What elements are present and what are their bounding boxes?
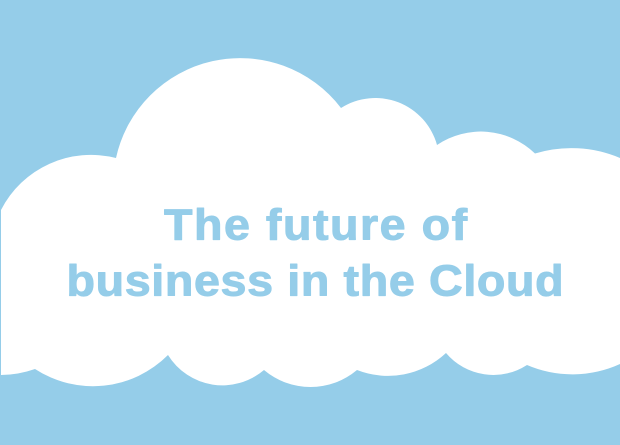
title line 1: The future of [164, 200, 468, 249]
title line 2: business in the Cloud [66, 256, 564, 305]
title [66, 200, 564, 305]
white cloud [1, 58, 620, 387]
